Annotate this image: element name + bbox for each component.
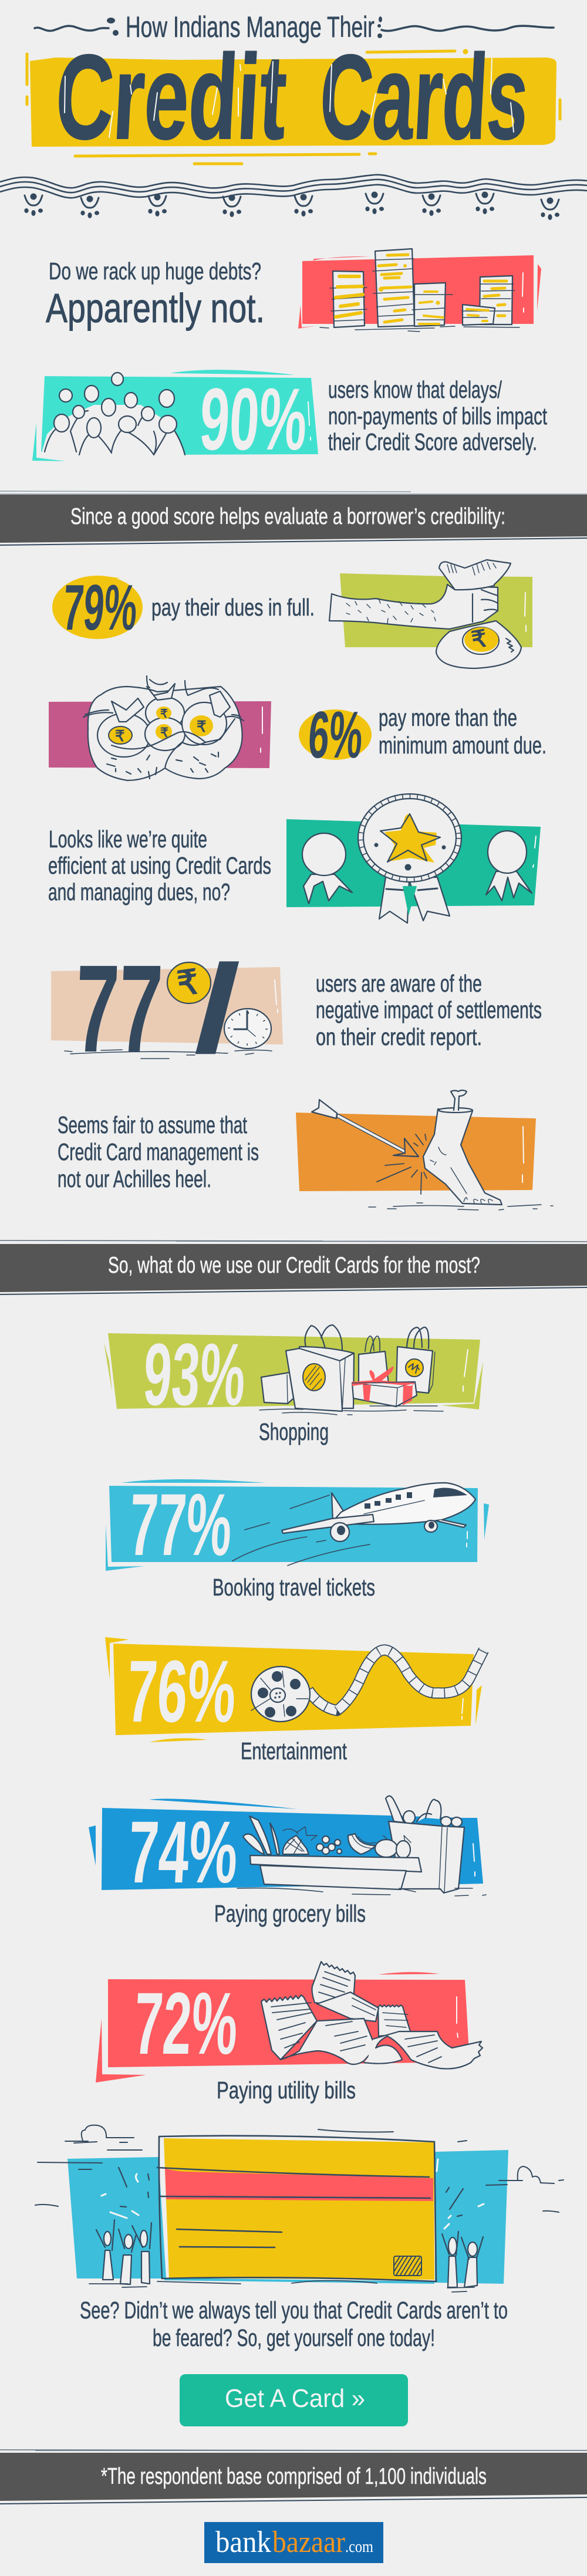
button: Get A Card bbox=[180, 2374, 408, 2426]
button: Get A Card: Get A Card » bbox=[225, 2384, 365, 2413]
stat: 93%: 93% bbox=[141, 1325, 248, 1424]
text: closing message: be feared? So, get yourself one today! bbox=[153, 2324, 435, 2351]
credit card bbox=[157, 2136, 436, 2281]
icon: clock bbox=[224, 1009, 271, 1049]
decorative wave band bbox=[0, 175, 587, 220]
text: Achilles: Seems fair to assume that bbox=[58, 1111, 247, 1138]
stack 2 bbox=[373, 249, 416, 327]
panel: 77% settlements bbox=[51, 939, 283, 1078]
panel: medals on green bbox=[286, 794, 541, 923]
money bags: ₹ bbox=[160, 725, 168, 740]
stat: 79%: 79% bbox=[60, 572, 140, 644]
label: Paying grocery bills: Paying grocery bills bbox=[214, 1900, 366, 1927]
icon: film reel and strip bbox=[251, 1650, 484, 1722]
stat: 79% bbox=[52, 572, 315, 644]
text: efficient: and managing dues, no? bbox=[48, 878, 230, 905]
text: 90% description: users know that delays/ bbox=[328, 376, 502, 403]
text: Achilles bbox=[58, 1111, 259, 1192]
panel: arrow in heel bbox=[296, 1090, 553, 1210]
heading: How Indians Manage Their: How Indians Manage Their bbox=[126, 11, 375, 43]
icon: grocery crate and bag bbox=[237, 1796, 486, 1896]
text: settlements: on their credit report. bbox=[316, 1023, 482, 1050]
text bbox=[379, 704, 546, 759]
text: Achilles: not our Achilles heel. bbox=[58, 1165, 211, 1192]
money bags: ₹ bbox=[160, 708, 168, 721]
logo: bankbazaar: bazaar bbox=[272, 2526, 345, 2559]
text: pay their dues in full. bbox=[151, 594, 315, 621]
right squiggle bbox=[377, 16, 554, 38]
icon: rupee coin bbox=[167, 962, 211, 1003]
big medal bbox=[358, 794, 461, 923]
clouds and sketch lines bbox=[35, 2125, 564, 2229]
text: settlements: users are aware of the bbox=[316, 970, 482, 997]
stat: 77: 77 bbox=[73, 939, 165, 1078]
arrow bbox=[312, 1100, 419, 1157]
ground bbox=[369, 1203, 553, 1210]
section band 1 bbox=[0, 491, 587, 545]
icon: rupee coin: ₹ bbox=[175, 962, 201, 1003]
panel: entertainment 76% bbox=[105, 1637, 484, 1742]
text: 90% description bbox=[328, 376, 547, 455]
bag top bbox=[439, 560, 511, 590]
logo: bankbazaar: bank bbox=[215, 2526, 271, 2559]
money bags bbox=[97, 676, 230, 757]
stat: 74%: 74% bbox=[126, 1803, 240, 1901]
title block bbox=[27, 11, 560, 164]
label: Entertainment: Entertainment bbox=[241, 1737, 347, 1764]
text: settlements bbox=[316, 970, 542, 1050]
arm bbox=[329, 584, 498, 629]
text: efficient bbox=[48, 826, 271, 905]
panel: credit card illustration bbox=[35, 2125, 564, 2292]
section band 3 bbox=[0, 2450, 587, 2504]
stat: 6%: 6% bbox=[306, 698, 365, 772]
section band 2 bbox=[0, 1240, 587, 1294]
impact lines bbox=[377, 1134, 427, 1194]
right small medal bbox=[486, 831, 532, 901]
icon: receipts bbox=[261, 1962, 483, 2069]
text: efficient: Looks like we’re quite bbox=[49, 826, 207, 853]
logo: bankbazaar: .com bbox=[345, 2538, 373, 2556]
icon: crowd of people bbox=[41, 373, 185, 455]
label: Shopping: Shopping bbox=[259, 1418, 329, 1445]
stat: 76%: 76% bbox=[124, 1642, 238, 1740]
left squiggle bbox=[35, 18, 119, 36]
text: debts question: Do we rack up huge debts? bbox=[49, 258, 261, 285]
cheering people bbox=[89, 2220, 483, 2292]
money bags: ₹ bbox=[197, 718, 207, 735]
text: debts question bbox=[46, 258, 265, 331]
yellow title panel bbox=[27, 49, 560, 164]
panel: travel 77% bbox=[106, 1475, 489, 1574]
icon: airplane bbox=[232, 1483, 475, 1566]
heading: Credit Cards: Credit bbox=[53, 30, 290, 164]
ground lines bbox=[65, 1050, 272, 1059]
money bag bbox=[436, 621, 521, 668]
panel: grocery 74% bbox=[89, 1796, 486, 1901]
percent slash: / bbox=[194, 939, 241, 1078]
stat: 72%: 72% bbox=[131, 1974, 240, 2073]
panel: stacks of bills on red bbox=[298, 249, 541, 332]
money bags: ₹ bbox=[115, 727, 125, 745]
panel: 90% users bbox=[32, 370, 318, 468]
left small medal bbox=[302, 833, 352, 904]
stat: 77%: 77% bbox=[127, 1475, 234, 1574]
logo: bankbazaar bbox=[204, 2522, 383, 2563]
stat: 90%: 90% bbox=[197, 370, 309, 468]
text: pay more than the bbox=[379, 704, 517, 731]
stack 1 bbox=[330, 271, 367, 327]
panel: utility bills 72% bbox=[96, 1962, 483, 2083]
panel: hand holding money bag bbox=[329, 560, 532, 668]
text: closing message bbox=[80, 2297, 508, 2351]
stack 3 bbox=[412, 283, 453, 326]
stack 4 bbox=[480, 276, 515, 324]
label: Booking travel tickets: Booking travel tickets bbox=[212, 1574, 375, 1601]
text: debts question: Apparently not. bbox=[46, 285, 265, 331]
stat: 6% bbox=[299, 698, 546, 772]
text: Achilles: Credit Card management is bbox=[58, 1138, 259, 1165]
icon: shopping bags and gift bbox=[259, 1325, 443, 1415]
stack 5 bbox=[462, 305, 495, 325]
foot bbox=[423, 1090, 502, 1205]
panel: crossed arms holding money bags bbox=[49, 676, 271, 780]
panel: shopping 93% bbox=[104, 1325, 483, 1424]
arms bbox=[88, 687, 242, 780]
label: Paying utility bills: Paying utility bills bbox=[217, 2077, 356, 2104]
text: efficient: efficient at using Credit Cards bbox=[48, 852, 271, 879]
panel: hand holding money bag: ₹ bbox=[470, 626, 489, 654]
